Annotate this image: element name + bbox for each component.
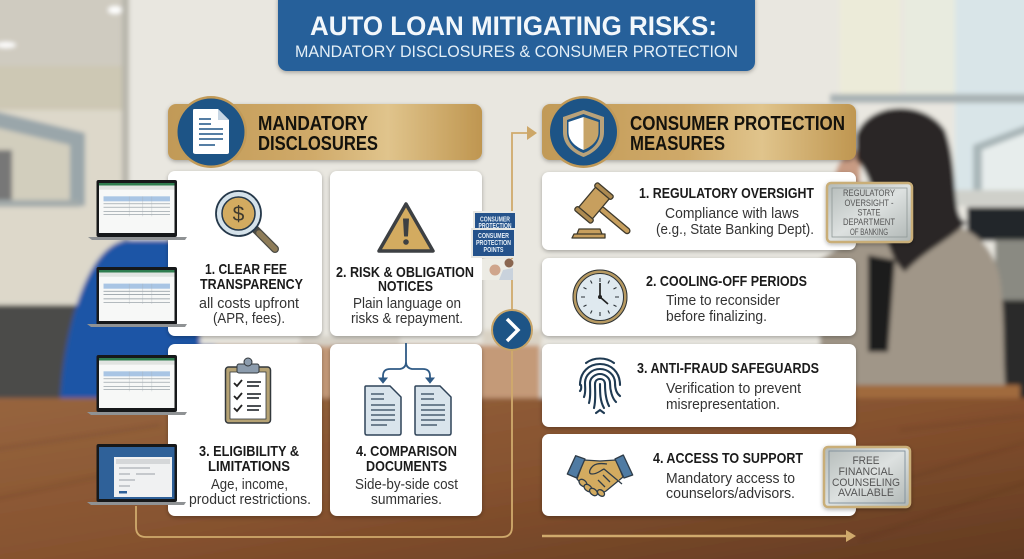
card description: Side-by-side cost: [355, 477, 458, 493]
title subheading: MANDATORY DISCLOSURES & CONSUMER PROTECTION: [295, 42, 738, 61]
icon: document in blue circle: [175, 96, 247, 168]
panel: access to support: [542, 434, 856, 516]
panel: comparison documents: summaries.: [371, 492, 442, 508]
card title: 1. REGULATORY OVERSIGHT: [639, 185, 814, 202]
card title: 2. RISK & OBLIGATION: [336, 264, 474, 281]
card title: 4. COMPARISON: [356, 443, 457, 460]
small consumer protection badges: PROTECTION: [478, 223, 512, 230]
panel: cooling-off periods: [542, 258, 856, 336]
card title: 1. CLEAR FEE: [205, 261, 287, 278]
header: mandatory disclosures: [168, 96, 482, 168]
table wood grain: [0, 415, 1024, 540]
plaque: regulatory oversight: STATE: [858, 208, 880, 218]
plaque: regulatory oversight: OF BANKING: [850, 227, 888, 238]
panel: regulatory oversight: (e.g., State Banking Dept).: [656, 222, 814, 238]
icon: magnifier with dollar: $: [233, 203, 245, 226]
panel: eligibility and limitations: [168, 344, 322, 516]
card description: all costs upfront: [199, 296, 299, 312]
plaque: free financial counseling: [824, 447, 910, 507]
plaque: free financial counseling: FINANCIAL: [838, 466, 894, 478]
card description: Compliance with laws: [665, 206, 799, 222]
card description: Verification to prevent: [666, 381, 801, 397]
panel: comparison documents: DOCUMENTS: [366, 458, 447, 475]
icon: warning triangle: [379, 204, 433, 251]
card title: 3. ELIGIBILITY &: [199, 443, 299, 460]
card description: Age, income,: [211, 477, 288, 493]
small consumer protection badges: [471, 211, 516, 280]
plaque: free financial counseling: AVAILABLE: [838, 487, 894, 499]
panel: access to support: counselors/advisors.: [666, 486, 795, 502]
small consumer protection badges: POINTS: [484, 247, 504, 254]
chevron button: [492, 310, 532, 350]
plaque: free financial counseling: FREE: [852, 455, 880, 467]
plaque: regulatory oversight: DEPARTMENT: [843, 217, 895, 228]
icon: fingerprint: [580, 358, 620, 413]
plaque: free financial counseling: COUNSELING: [832, 477, 900, 489]
title heading: AUTO LOAN MITIGATING RISKS:: [310, 11, 717, 41]
header: consumer protection measures: MEASURES: [630, 132, 725, 155]
card title: 4. ACCESS TO SUPPORT: [653, 450, 803, 467]
panel: clear fee transparency: (APR, fees).: [213, 311, 285, 327]
card description: Time to reconsider: [666, 293, 780, 309]
card title: 2. COOLING-OFF PERIODS: [646, 273, 807, 290]
icon: shield in blue circle: [548, 96, 620, 168]
small consumer protection badges: PROTECTION: [476, 240, 511, 247]
heading text: MANDATORY: [258, 112, 368, 135]
small consumer protection badges: CONSUMER: [480, 216, 510, 224]
panel: risk and obligation notices: NOTICES: [378, 278, 433, 295]
panel: cooling-off periods: before finalizing.: [666, 309, 767, 325]
laptop: spreadsheet 1: [88, 180, 187, 240]
card title: 3. ANTI-FRAUD SAFEGUARDS: [637, 360, 819, 377]
heading text: CONSUMER PROTECTION: [630, 112, 845, 135]
panel: regulatory oversight: [542, 172, 856, 250]
icon: handshake: [567, 455, 633, 498]
panel: clear fee transparency: TRANSPARENCY: [200, 276, 303, 293]
panel: risk and obligation notices: risks & repayment.: [351, 311, 463, 327]
panel: anti-fraud safeguards: misrepresentation.: [666, 397, 780, 413]
plaque: regulatory oversight: [827, 183, 912, 242]
panel: clear fee transparency: [168, 171, 322, 336]
laptop: spreadsheet 3: [87, 355, 187, 415]
panel: eligibility and limitations: product restrictions.: [189, 492, 311, 508]
badge photo: [482, 258, 514, 280]
panel: anti-fraud safeguards: [542, 344, 856, 427]
panel: comparison documents: [330, 343, 482, 516]
panel: risk and obligation notices: [330, 171, 482, 336]
header: mandatory disclosures: DISCLOSURES: [258, 132, 378, 155]
title banner: [278, 0, 755, 71]
icon: two documents with split arrow: [365, 343, 451, 435]
laptop: spreadsheet 2: [87, 267, 187, 327]
card description: Plain language on: [353, 296, 461, 312]
panel: eligibility and limitations: LIMITATIONS: [208, 458, 290, 475]
header: consumer protection measures: [542, 96, 856, 168]
bottom gold arrow: [542, 530, 856, 542]
icon: clock: [573, 270, 627, 324]
plaque: regulatory oversight: OVERSIGHT -: [844, 198, 894, 209]
icon: gavel: [572, 182, 631, 238]
icon: clipboard checklist: [226, 358, 270, 423]
icon: magnifier with dollar: [216, 191, 275, 249]
card description: Mandatory access to: [666, 471, 795, 487]
small consumer protection badges: CONSUMER: [478, 233, 509, 240]
laptop: online form: [87, 444, 186, 505]
plaque: regulatory oversight: REGULATORY: [843, 188, 896, 199]
connector arrow from laptops to consumer protection header: [136, 126, 537, 537]
